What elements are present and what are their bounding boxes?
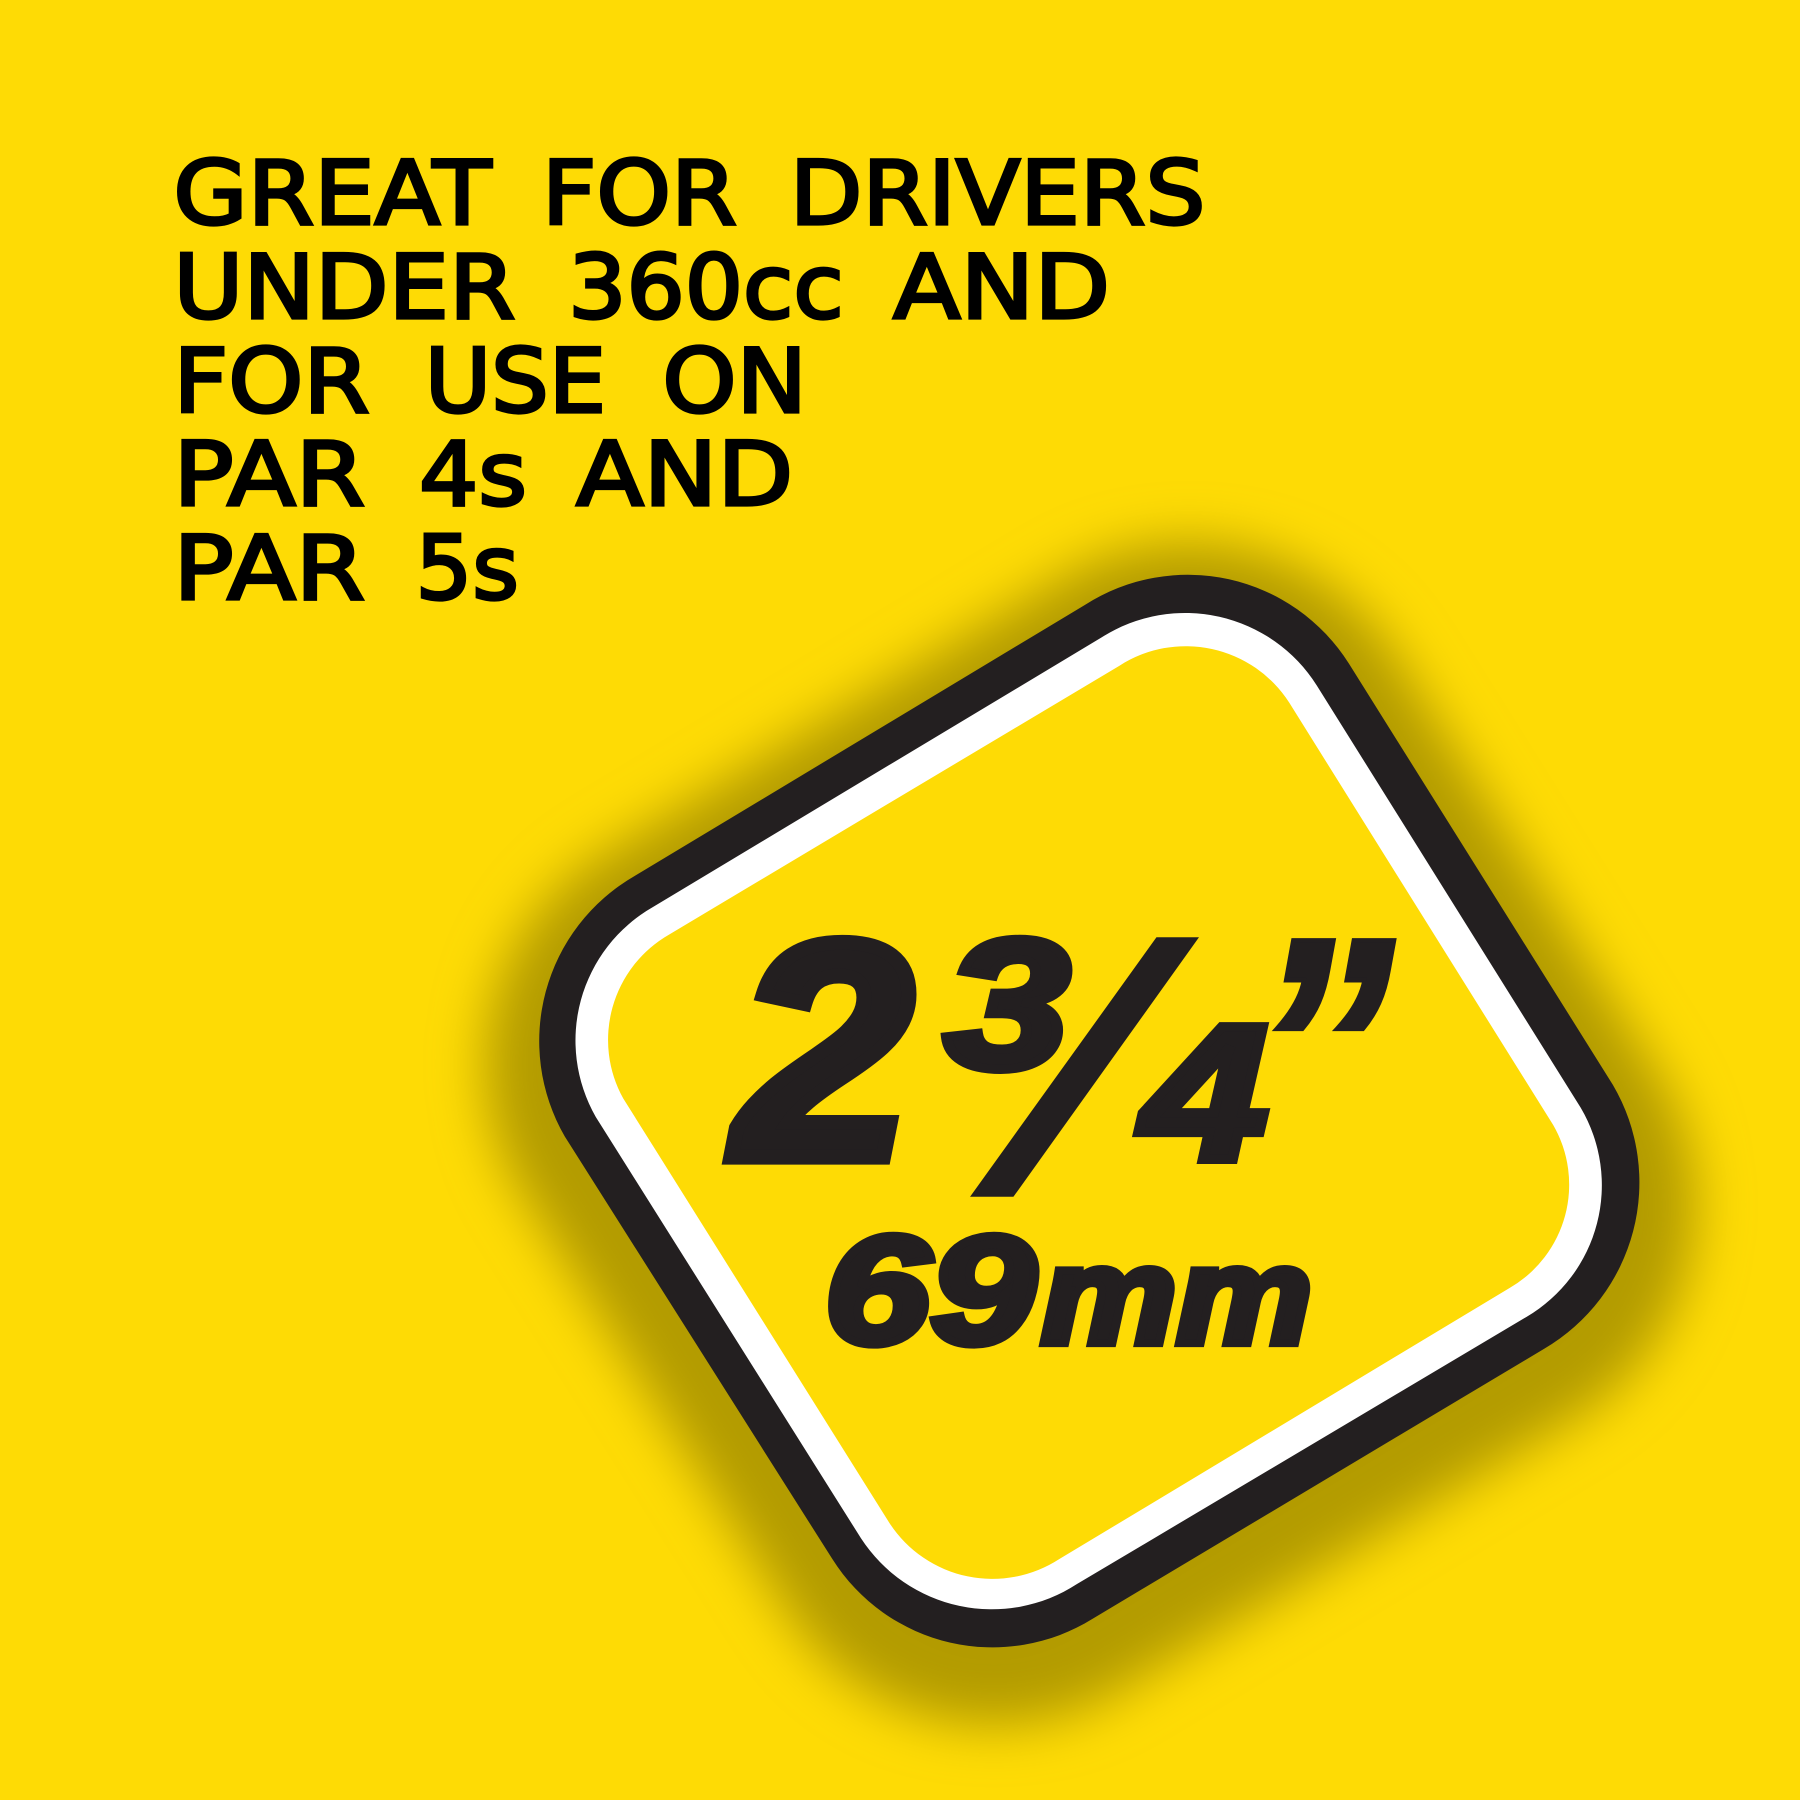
heading: great for drivers: [173, 142, 1205, 620]
fraction slash: /: [932, 876, 1235, 1263]
heading line 4: AND: [576, 423, 793, 526]
inch mark: ”: [1250, 872, 1394, 1223]
heading line 2: AND: [893, 236, 1110, 339]
size label: 2 3/4 inches: [731, 872, 1394, 1263]
metric size label: 69mm: 69: [824, 1204, 1035, 1376]
heading line 1: DRIVERS: [790, 142, 1205, 245]
heading line 2: UNDER: [173, 236, 515, 339]
heading line 5: PAR: [173, 517, 365, 620]
badge white ring: [575, 613, 1602, 1609]
badge: rounded diamond: [539, 575, 1639, 1647]
badge black outline: [539, 575, 1639, 1647]
heading line 3: USE: [425, 330, 606, 433]
heading line 2: 360cc: [568, 236, 844, 339]
heading line 4: PAR: [173, 423, 365, 526]
heading line 1: GREAT: [173, 142, 492, 245]
heading line 1: FOR: [542, 142, 737, 245]
badge shadow: [540, 598, 1641, 1670]
heading line 3: FOR: [173, 330, 370, 433]
whole number 2: 2: [731, 879, 912, 1223]
badge yellow centre: [608, 646, 1569, 1579]
heading line 4: 4s: [419, 423, 527, 526]
heading line 5: 5s: [416, 517, 519, 620]
heading line 3: ON: [662, 330, 807, 433]
denominator 4: 4: [1138, 986, 1268, 1201]
numerator 3: 3: [945, 903, 1069, 1107]
metric size label: 69mm: mm: [1041, 1219, 1312, 1373]
